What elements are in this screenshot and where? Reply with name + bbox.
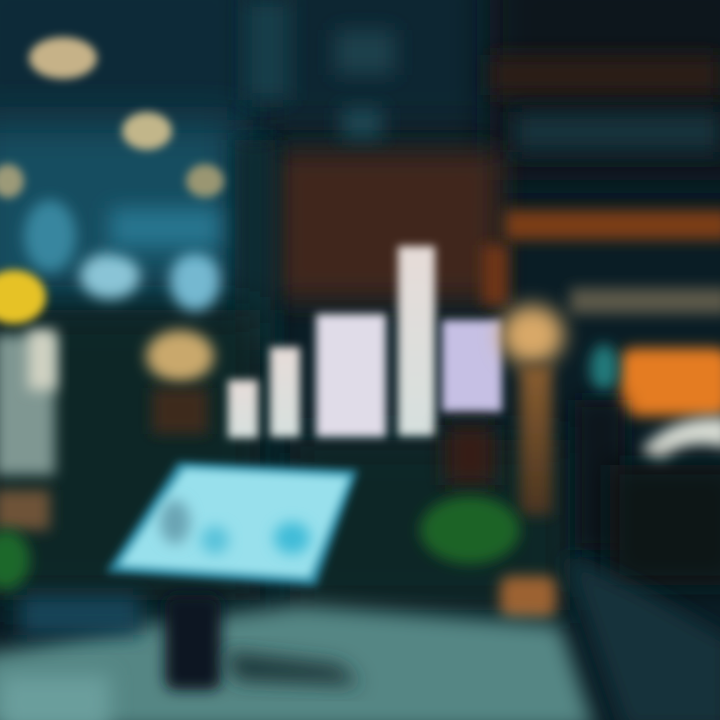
dark right seating bbox=[565, 400, 720, 720]
orange planter bbox=[500, 576, 556, 618]
floor bbox=[0, 595, 595, 720]
yellow lamp bbox=[0, 270, 46, 324]
blue window glows bbox=[24, 200, 220, 311]
monitor stand bbox=[165, 595, 360, 690]
monitor screen bbox=[106, 462, 358, 586]
left white column bbox=[0, 330, 56, 530]
green plants bbox=[0, 496, 520, 590]
orange display on right bbox=[590, 344, 720, 462]
right lamp and post bbox=[445, 305, 564, 515]
ceiling lamps bbox=[0, 37, 224, 198]
orange wall band bbox=[482, 210, 720, 314]
central lamp bbox=[146, 330, 214, 434]
white bar chart bbox=[228, 246, 502, 438]
